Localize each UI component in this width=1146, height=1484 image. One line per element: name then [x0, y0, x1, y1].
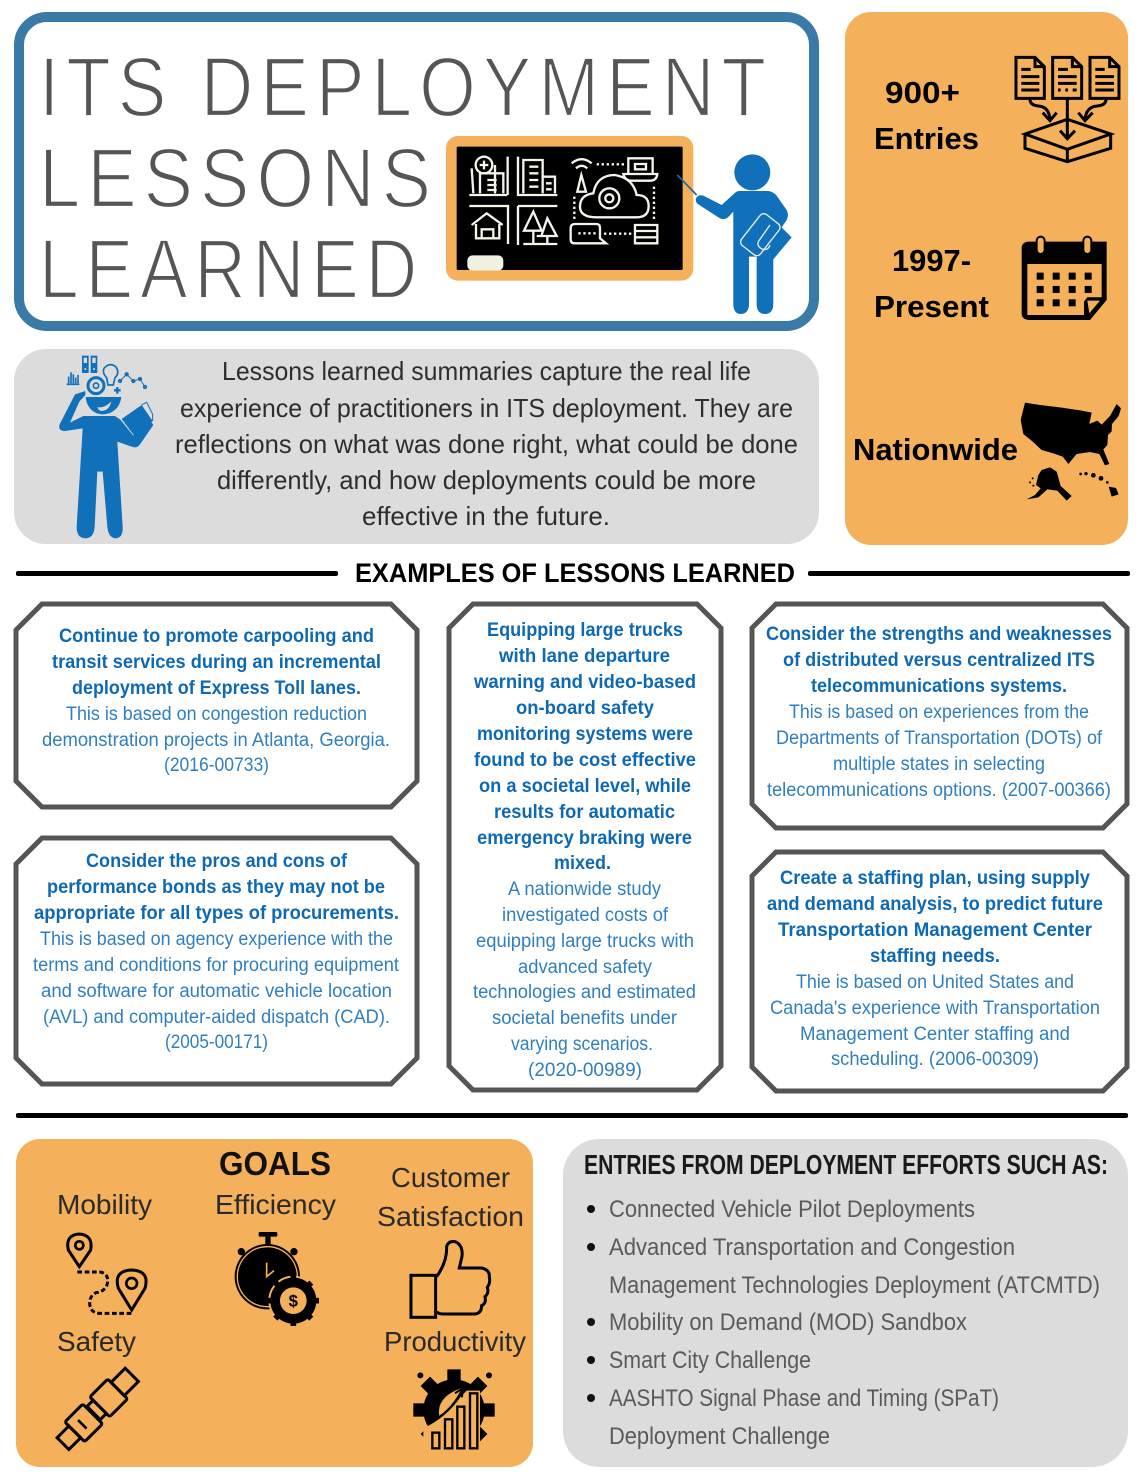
card heading: warning and video-based	[473, 672, 696, 693]
icon: gear with rising bars	[413, 1369, 495, 1452]
stat: date range: 1997-	[892, 243, 971, 278]
card body: A nationwide study	[508, 879, 661, 900]
title: ITS DEPLOYMENT	[39, 40, 773, 134]
card heading: Consider the strengths and weaknesses	[766, 624, 1112, 645]
stat: coverage: Nationwide	[853, 432, 1018, 467]
card: large truck safety systems	[449, 604, 721, 1090]
icon: calendar	[1022, 237, 1107, 320]
title: LESSONS	[39, 131, 438, 225]
goal label: productivity: Productivity	[384, 1326, 526, 1357]
icon: route with map pins	[68, 1234, 146, 1313]
goal label: mobility: Mobility	[57, 1189, 152, 1220]
card body: (2020-00989)	[528, 1060, 642, 1081]
icon: United States map	[1021, 403, 1121, 501]
goal label: customer satisfaction: Customer	[391, 1162, 510, 1193]
card body: Canada's experience with Transportation	[770, 998, 1100, 1019]
card body	[767, 702, 1111, 801]
card body: (2005-00171)	[165, 1032, 268, 1053]
card body: This is based on congestion reduction	[66, 704, 367, 725]
card heading	[767, 868, 1103, 967]
goal label: customer satisfaction: Satisfaction	[377, 1201, 524, 1232]
heading: examples of lessons learned	[16, 558, 1130, 588]
card body: societal benefits under	[492, 1008, 678, 1029]
card heading: performance bonds as they may not be	[47, 877, 385, 898]
icon: thinking figure with book	[59, 356, 153, 538]
icon: stopwatch with dollar gear	[235, 1232, 319, 1326]
card heading: on-board safety	[516, 698, 654, 719]
title: LEARNED	[39, 222, 424, 316]
card heading	[766, 624, 1112, 697]
panel: deployment entries	[563, 1139, 1128, 1467]
card heading: Continue to promote carpooling and	[59, 626, 374, 647]
list: deployment efforts: Smart City Challenge	[609, 1347, 811, 1374]
card: staffing plan	[752, 852, 1127, 1091]
text: intro paragraph: reflections on what was done right, what could be done	[175, 429, 798, 459]
card heading: found to be cost effective	[474, 750, 696, 771]
list: deployment efforts: Mobility on Demand (MOD) Sandbox	[609, 1309, 967, 1336]
card body: advanced safety	[518, 957, 652, 978]
text: intro paragraph: differently, and how deployments could be more	[217, 465, 756, 495]
card heading: Create a staffing plan, using supply	[780, 868, 1090, 889]
card body: terms and conditions for procuring equipment	[33, 955, 400, 976]
stat: entries	[874, 75, 979, 156]
list: deployment efforts: Deployment Challenge	[609, 1423, 830, 1450]
icon: chalkboard	[446, 136, 693, 281]
card body: This is based on experiences from the	[789, 702, 1089, 723]
card heading: mixed.	[554, 853, 611, 874]
card heading: monitoring systems were	[477, 724, 693, 745]
card heading: on a societal level, while	[479, 776, 691, 797]
card body: (2016-00733)	[164, 755, 269, 776]
panel: intro	[14, 349, 819, 544]
heading: examples of lessons learned: EXAMPLES OF LESSONS LEARNED	[355, 558, 795, 588]
card body: investigated costs of	[502, 905, 669, 926]
title	[39, 40, 773, 316]
card body: scheduling. (2006-00309)	[831, 1049, 1039, 1070]
icon: safety belt	[53, 1365, 142, 1454]
card heading: with lane departure	[498, 646, 670, 667]
card heading: telecommunications systems.	[811, 676, 1067, 697]
card heading: Consider the pros and cons of	[86, 851, 348, 872]
card body	[42, 704, 390, 776]
goal label: customer satisfaction	[377, 1162, 524, 1232]
stat: entries: 900+	[885, 75, 960, 110]
card body: Management Center staffing and	[800, 1024, 1070, 1045]
card body: This is based on agency experience with the	[40, 929, 393, 950]
text: intro paragraph: effective in the future.	[362, 501, 610, 531]
card heading: Equipping large trucks	[487, 620, 683, 641]
card body	[33, 929, 400, 1053]
card body: equipping large trucks with	[476, 931, 694, 952]
icon: thumbs up	[411, 1242, 490, 1317]
card body: varying scenarios.	[511, 1034, 653, 1055]
text: intro paragraph	[175, 356, 798, 531]
card body: multiple states in selecting	[833, 754, 1045, 775]
list: deployment efforts: Advanced Transportation and Congestion	[609, 1234, 1015, 1261]
text: intro paragraph: experience of practitioners in ITS deployment. They are	[180, 393, 793, 423]
icon: stopwatch with dollar gear: $	[289, 1292, 299, 1311]
card heading: appropriate for all types of procurements.	[34, 903, 399, 924]
card heading: of distributed versus centralized ITS	[783, 650, 1095, 671]
card heading: and demand analysis, to predict future	[767, 894, 1103, 915]
text: intro paragraph: Lessons learned summaries capture the real life	[222, 356, 751, 386]
card body: technologies and estimated	[473, 982, 696, 1003]
card heading: results for automatic	[494, 802, 675, 823]
panel: title frame	[19, 17, 814, 326]
card heading	[52, 626, 381, 699]
icon: presenter figure	[677, 154, 792, 314]
card body	[473, 879, 696, 1081]
card body: Departments of Transportation (DOTs) of	[776, 728, 1103, 749]
card body: Thie is based on United States and	[796, 972, 1074, 993]
card body: demonstration projects in Atlanta, Georgia.	[42, 730, 390, 751]
stat: entries: Entries	[874, 121, 979, 156]
stat: date range: Present	[874, 289, 989, 324]
list: deployment efforts: AASHTO Signal Phase and Timing (SPaT)	[609, 1385, 999, 1412]
panel: goals	[16, 1139, 533, 1467]
panel: key stats	[845, 12, 1128, 545]
card body: (AVL) and computer-aided dispatch (CAD).	[43, 1007, 390, 1028]
list: deployment efforts	[587, 1196, 1100, 1450]
card heading: Transportation Management Center	[778, 920, 1093, 941]
stat: date range	[874, 243, 989, 324]
card: distributed versus centralized systems	[752, 604, 1127, 828]
card heading: staffing needs.	[870, 946, 1000, 967]
goal label: safety: Safety	[57, 1326, 136, 1357]
goal label: efficiency: Efficiency	[215, 1189, 336, 1220]
list: deployment efforts: Connected Vehicle Pilot Deployments	[609, 1196, 975, 1223]
card heading	[473, 620, 696, 874]
card heading: transit services during an incremental	[52, 652, 381, 673]
icon: documents into box	[1016, 57, 1119, 162]
card body: and software for automatic vehicle location	[41, 981, 392, 1002]
card body	[770, 972, 1100, 1070]
list: deployment efforts: Management Technologies Deployment (ATCMTD)	[609, 1272, 1100, 1299]
card heading: deployment of Express Toll lanes.	[72, 678, 361, 699]
heading: goals: GOALS	[219, 1145, 331, 1182]
card heading	[34, 851, 399, 924]
card: performance bonds	[16, 838, 417, 1084]
card heading: emergency braking were	[477, 828, 692, 849]
card: carpooling and transit	[16, 604, 417, 807]
card body: telecommunications options. (2007-00366)	[767, 780, 1111, 801]
